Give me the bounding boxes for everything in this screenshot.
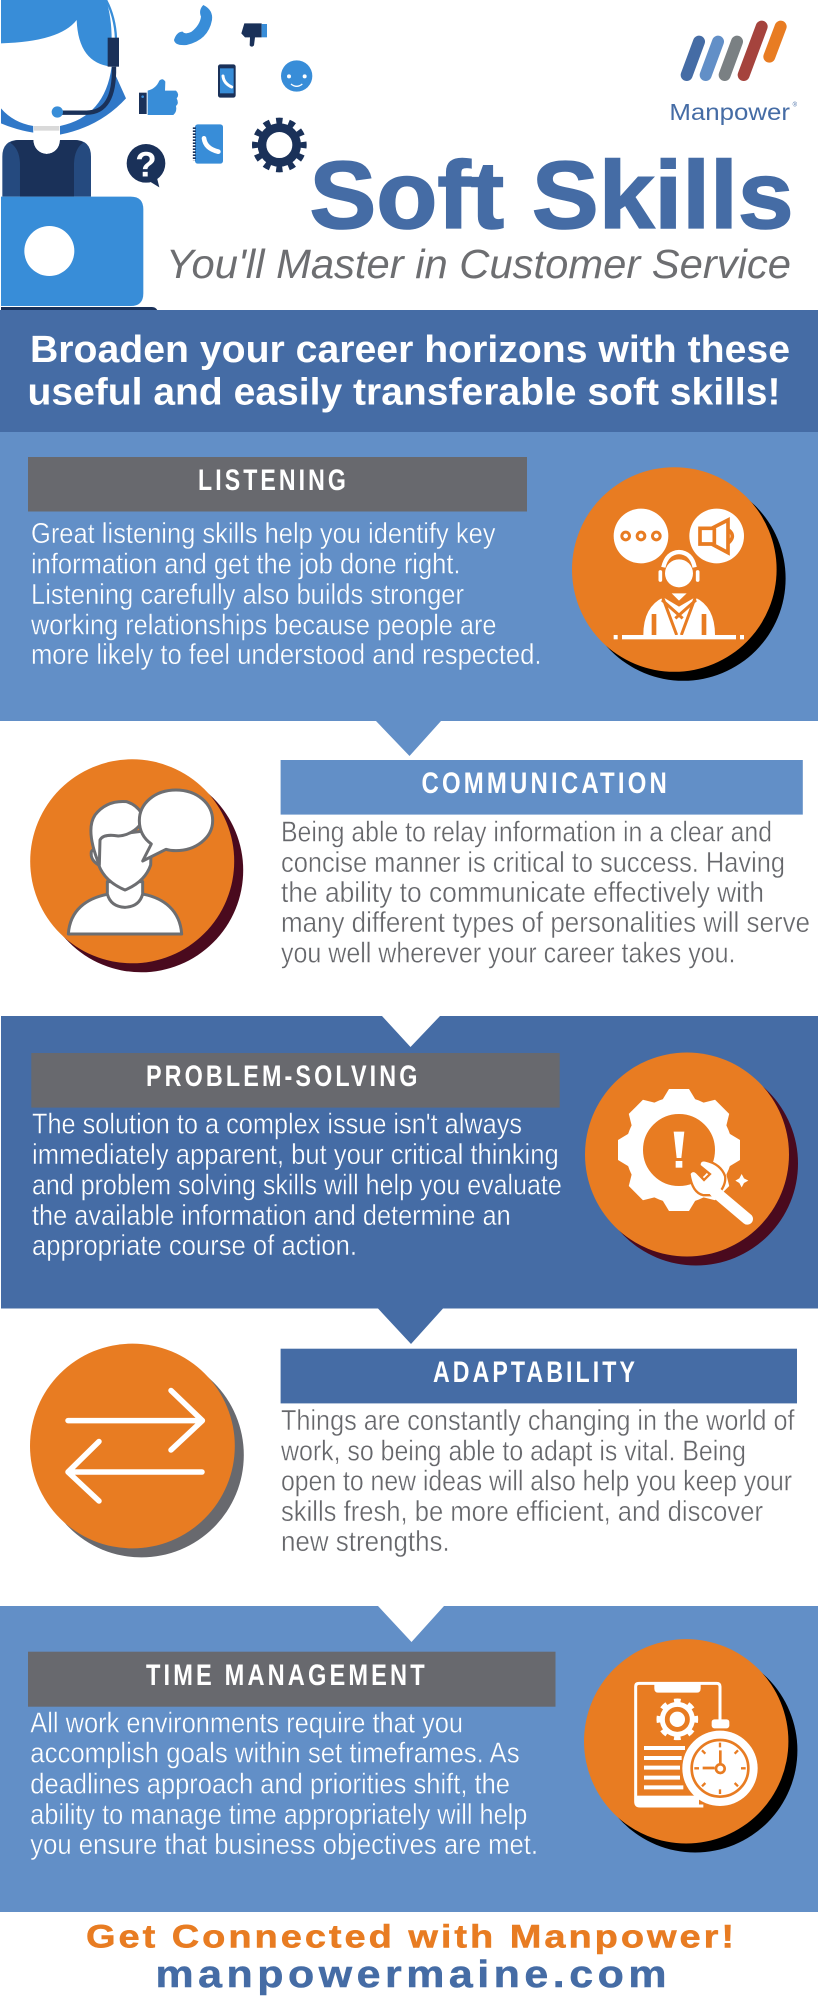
laptop logo (24, 226, 74, 276)
text: adaptability: work, so being able to adapt is vital. Being (280, 1435, 746, 1467)
text: problem-solving: appropriate course of action. (32, 1230, 357, 1262)
logo: Manpower (669, 27, 798, 125)
text: adaptability: new strengths. (281, 1526, 450, 1558)
heading: time management: TIME MANAGEMENT (146, 1659, 428, 1692)
icons: floating customer service symbols (127, 5, 312, 187)
text: communication (281, 816, 810, 970)
headset band (106, 0, 116, 38)
text: time management: deadlines approach and priorities shift, the (30, 1768, 510, 1800)
icon: thumbs down (241, 23, 267, 47)
icon: phone notebook (194, 124, 223, 164)
collar shadow (34, 126, 59, 131)
icon: question bubble: ? (135, 146, 157, 185)
earpiece (108, 38, 119, 67)
heading: time management (28, 1652, 556, 1707)
logo wordmark: Manpower (669, 99, 790, 125)
banner: useful and easily transferable soft skills! (28, 372, 780, 414)
panel: adaptability (30, 1344, 797, 1558)
icon: phone handset (174, 5, 212, 45)
text: time management: you ensure that business objectives are met. (30, 1829, 538, 1861)
text: listening: more likely to feel understood and respected. (31, 639, 542, 671)
text: time management (30, 1708, 538, 1861)
footer website: manpowermaine.com (156, 1954, 671, 1996)
logo bars (687, 27, 781, 75)
text: listening: working relationships because people are (30, 610, 497, 642)
heading: problem-solving: PROBLEM-SOLVING (146, 1060, 420, 1093)
microphone (52, 106, 63, 118)
text: time management: accomplish goals within set timeframes. As (30, 1738, 520, 1770)
heading: adaptability: ADAPTABILITY (433, 1356, 638, 1389)
registered mark: ® (793, 102, 798, 109)
text: adaptability (280, 1405, 795, 1558)
text: time management: ability to manage time appropriately will help (30, 1799, 527, 1831)
text: problem-solving (32, 1109, 562, 1262)
icon: gear with wrench (585, 1052, 798, 1266)
heading: listening: LISTENING (198, 464, 349, 497)
lower hair (1, 67, 126, 135)
icon: smartphone (218, 64, 236, 98)
torso (2, 140, 91, 197)
icon: question bubble (127, 144, 165, 187)
microphone boom (60, 67, 114, 113)
text: communication: the ability to communicate effectively with (281, 877, 764, 909)
text: listening: Listening carefully also builds stronger (31, 579, 464, 611)
icon: listening agent (572, 467, 786, 681)
text: problem-solving: The solution to a complex issue isn't always (32, 1109, 522, 1141)
icon: thumbs up (139, 79, 178, 115)
panel background (0, 432, 818, 756)
text: adaptability: skills fresh, be more efficient, and discover (281, 1496, 763, 1528)
text: problem-solving: the available information and determine an (32, 1200, 511, 1232)
icon: person with speech bubble (30, 759, 243, 972)
heading: communication (281, 760, 803, 815)
laptop base (1, 307, 158, 313)
panel: problem-solving (1, 1016, 818, 1344)
title: Soft Skills (310, 142, 794, 249)
illustration: customer service agent with headset (1, 0, 158, 313)
panel: communication (30, 759, 810, 972)
icon: tablet with stopwatch (584, 1639, 797, 1853)
text: problem-solving: immediately apparent, but your critical thinking (32, 1139, 559, 1171)
heading: problem-solving (31, 1053, 560, 1108)
icon: smiley (281, 60, 312, 92)
subtitle: You'll Master in Customer Service (166, 241, 791, 287)
hair (1, 0, 112, 67)
panel: time management (0, 1606, 818, 1912)
shirt (10, 140, 83, 197)
panel: listening (0, 432, 818, 756)
panel background (0, 1606, 818, 1912)
laptop (1, 197, 143, 306)
text: listening (30, 518, 542, 671)
footer call to action: Get Connected with Manpower! (86, 1918, 737, 1954)
text: listening: Great listening skills help you identify key (31, 518, 496, 550)
banner (0, 310, 818, 432)
text: time management: All work environments require that you (30, 1708, 463, 1740)
heading: adaptability (281, 1349, 797, 1403)
panel background (1, 1016, 818, 1344)
text: listening: information and get the job done right. (31, 548, 460, 580)
neck (33, 126, 60, 154)
icon: gear (255, 121, 303, 169)
heading: communication: COMMUNICATION (422, 767, 670, 800)
text: problem-solving: and problem solving skills will help you evaluate (32, 1170, 562, 1202)
banner: Broaden your career horizons with these (30, 329, 790, 371)
icon: exchange arrows (30, 1344, 244, 1557)
text: communication: you well wherever your career takes you. (281, 938, 736, 970)
heading: listening (28, 457, 527, 512)
